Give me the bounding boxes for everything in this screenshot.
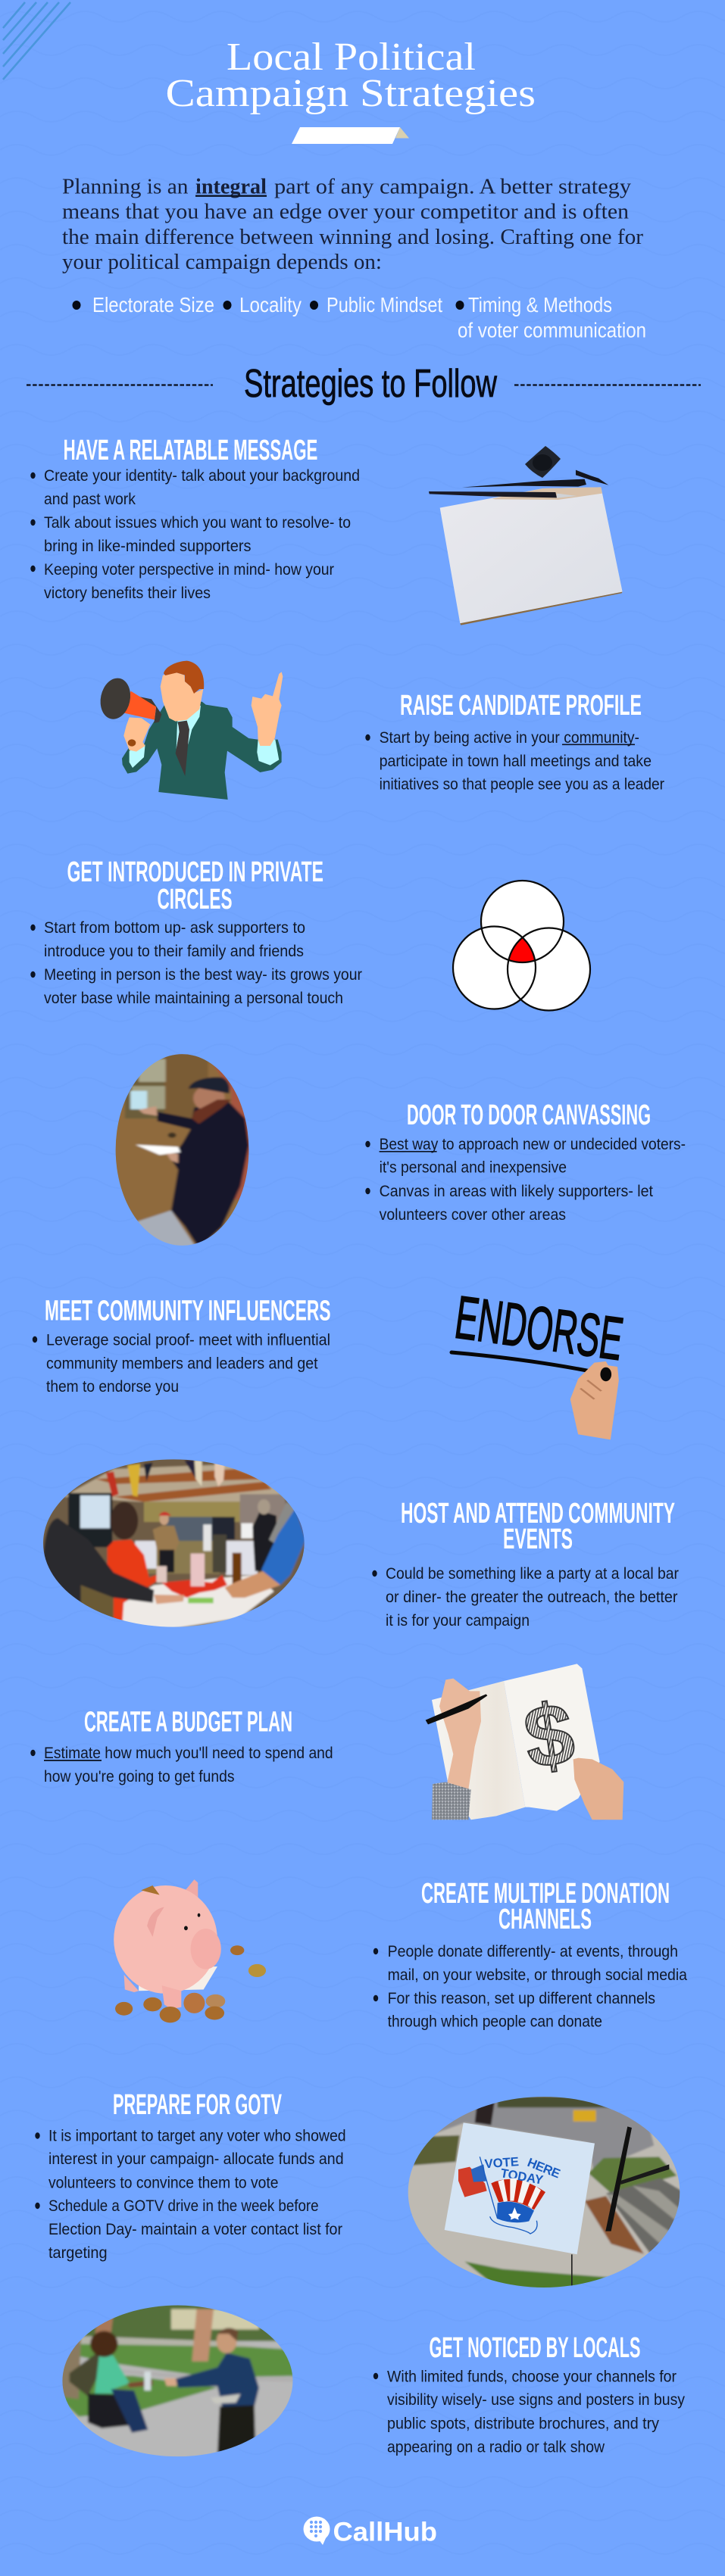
bullet list: Estimate how much you'll need to spend and	[44, 1745, 333, 1762]
bullet list: initiatives so that people see you as a leader	[380, 775, 664, 794]
bullet list: It is important to target any voter who showed	[48, 2128, 346, 2145]
campaign factors list: Public Mindset	[327, 293, 442, 317]
bullet list: appearing on a radio or talk show	[387, 2438, 605, 2456]
heading: HAVE A RELATABLE MESSAGE	[64, 435, 317, 466]
intro paragraph: the main difference between winning and losing. Crafting one for	[62, 225, 643, 249]
heading: PREPARE FOR GOTV	[113, 2089, 282, 2121]
panel: host and attend community events	[38, 1454, 679, 1632]
bullet list: victory benefits their lives	[44, 585, 211, 602]
intro paragraph: part of any campaign. A better strategy	[274, 174, 632, 198]
bullet list: Talk about issues which you want to resolve- to	[44, 514, 351, 532]
heading	[401, 1498, 675, 1555]
logo: CallHub: CallHub	[333, 2517, 437, 2547]
bullet list: volunteers cover other areas	[380, 1206, 566, 1224]
bullet list: or diner- the greater the outreach, the better	[386, 1589, 678, 1606]
bullet list: targeting	[48, 2244, 108, 2262]
bullet list: Meeting in person is the best way- its grows your	[44, 966, 362, 984]
bullet list: volunteers to convince them to vote	[48, 2175, 279, 2191]
intro paragraph: your political campaign depends on:	[62, 250, 382, 274]
bullet list: Best way to approach new or undecided voters-	[380, 1136, 686, 1153]
campaign factors list: Electorate Size	[92, 293, 214, 317]
image: hands drawing dollar sign in notebook	[426, 1664, 623, 1820]
campaign factors list: Timing & Methods	[468, 293, 612, 317]
decorative corner stripes	[3, 2, 70, 80]
bullet list: mail, on your website, or through social media	[388, 1966, 687, 1984]
bullet list: Create your identity- talk about your background	[44, 467, 360, 485]
bullet list: Election Day- maintain a voter contact list for	[48, 2221, 342, 2238]
panel: get introduced in private circles	[30, 856, 590, 1010]
heading: GET INTRODUCED IN PRIVATE	[67, 856, 323, 888]
chart: venn diagram	[453, 881, 590, 1010]
photo: community event	[38, 1454, 311, 1632]
panel: create a budget plan	[30, 1664, 623, 1820]
panel: prepare for GOTV	[35, 2089, 686, 2294]
bullet list: Could be something like a party at a local bar	[386, 1565, 679, 1583]
panel: get noticed by locals	[60, 2303, 685, 2460]
panel: create multiple donation channels	[114, 1878, 687, 2031]
bullet list	[372, 1565, 679, 1629]
intro paragraph	[62, 174, 643, 274]
bullet list: through which people can donate	[388, 2013, 602, 2031]
photo: handing out brochures	[60, 2303, 296, 2460]
bullet list: voter base while maintaining a personal touch	[44, 990, 343, 1007]
bullet list	[35, 2128, 346, 2262]
bullet list	[30, 467, 360, 602]
bullet list: participate in town hall meetings and take	[380, 753, 652, 770]
bullet list: For this reason, set up different channels	[388, 1990, 655, 2007]
title	[165, 36, 536, 115]
intro paragraph: Planning is an	[62, 174, 189, 198]
bullet list	[30, 919, 362, 1007]
bullet list: People donate differently- at events, through	[388, 1943, 678, 1960]
bullet list	[373, 2369, 685, 2456]
sign text: TODAY	[499, 2166, 544, 2188]
campaign factors list	[73, 293, 646, 342]
panel: door to door canvassing	[111, 1051, 686, 1249]
heading	[67, 856, 323, 915]
sign text: VOTE	[484, 2154, 520, 2171]
heading: CIRCLES	[158, 884, 232, 915]
title: Campaign Strategies	[165, 72, 536, 115]
bullet list: how you're going to get funds	[44, 1768, 235, 1785]
bullet list	[33, 1331, 330, 1396]
heading: CHANNELS	[498, 1904, 592, 1935]
bullet list: interest in your campaign- allocate funds and	[48, 2150, 344, 2168]
panel: raise candidate profile	[97, 661, 664, 800]
bullet list: them to endorse you	[46, 1378, 179, 1396]
bullet list: Start from bottom up- ask supporters to	[44, 919, 305, 937]
bullet list: bring in like-minded supporters	[44, 538, 252, 555]
bullet list	[365, 729, 664, 794]
section heading: strategies to follow: Strategies to Follow	[244, 362, 497, 406]
bullet list	[365, 1136, 686, 1224]
bullet list: Leverage social proof- meet with influential	[46, 1331, 330, 1349]
bullet list: introduce you to their family and friends	[44, 943, 304, 960]
photo: vote here today yard sign	[408, 2097, 680, 2288]
panel: have a relatable message	[30, 435, 623, 625]
image: paper, pens and inkwell	[429, 446, 623, 625]
bullet list: Schedule a GOTV drive in the week before	[48, 2197, 319, 2215]
intro paragraph: integral	[195, 174, 267, 198]
panel: meet community influencers	[33, 1283, 627, 1439]
bullet list: and past work	[44, 491, 136, 508]
bullet list: With limited funds, choose your channels for	[387, 2369, 677, 2385]
heading: MEET COMMUNITY INFLUENCERS	[45, 1296, 330, 1327]
bullet list: it is for your campaign	[386, 1612, 530, 1629]
illustration: piggy bank and coins	[114, 1879, 266, 2022]
photo: canvasser at door	[111, 1051, 255, 1249]
bullet list: public spots, distribute brochures, and try	[387, 2415, 659, 2433]
image: hands drawing dollar sign in notebook: $	[518, 1685, 580, 1787]
illustration: man with megaphone	[97, 661, 283, 800]
title: Local Political	[227, 36, 476, 79]
bullet list: it's personal and inexpensive	[380, 1159, 567, 1177]
heading: CREATE A BUDGET PLAN	[84, 1706, 292, 1738]
campaign factors list: of voter communication	[458, 318, 646, 342]
bullet list: Canvas in areas with likely supporters- let	[380, 1183, 653, 1200]
campaign factors list: Locality	[239, 293, 302, 317]
heading	[421, 1878, 670, 1935]
bullet list	[373, 1943, 687, 2031]
heading: EVENTS	[503, 1523, 573, 1555]
bullet list: Start by being active in your community-	[380, 729, 639, 747]
title ribbon	[292, 127, 409, 144]
bullet list: visibility wisely- use signs and posters in busy	[387, 2391, 685, 2409]
sign text: HERE	[525, 2155, 562, 2181]
sign text	[484, 2157, 561, 2184]
illustration: endorse handwriting	[452, 1283, 627, 1439]
bullet list: community members and leaders and get	[46, 1355, 318, 1372]
intro paragraph: means that you have an edge over your competitor and is often	[62, 200, 630, 224]
bullet list	[30, 1745, 333, 1785]
bullet list: Keeping voter perspective in mind- how your	[44, 561, 334, 579]
